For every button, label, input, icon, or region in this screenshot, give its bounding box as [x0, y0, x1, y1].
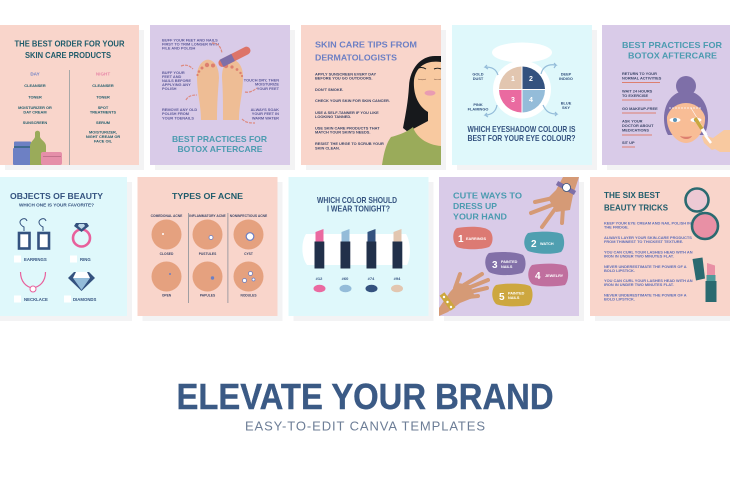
swatches	[314, 285, 403, 292]
eyeshadow palette	[492, 42, 552, 118]
tricks list: IRON IN UNDER TWO MINUTES FLAT.	[604, 254, 674, 258]
acne labels	[151, 214, 268, 298]
instruction notes: POLISH	[162, 86, 177, 91]
feet illustration	[196, 60, 243, 120]
heading: CUTE WAYS TO	[453, 190, 522, 200]
checkbox labels: DIAMONDS	[73, 297, 97, 302]
instruction notes: WARM WATER	[252, 116, 279, 120]
icon: ring	[73, 223, 90, 246]
tips list: MATCH YOUR SKIN'S NEEDS.	[315, 130, 370, 134]
list: GO MAKEUP-FREE	[622, 106, 658, 111]
tips list: LOOKING TANNED.	[315, 114, 351, 119]
heading	[10, 191, 103, 208]
panel: eyeshadow colour	[452, 25, 597, 170]
icon: nail file	[217, 45, 252, 68]
heading: best order	[14, 38, 124, 60]
instruction notes: FEET AND	[162, 74, 181, 79]
day column: SUNSCREEN	[23, 120, 47, 125]
colour labels: GOLD	[472, 72, 484, 76]
panel: six best beauty tricks	[590, 177, 730, 321]
blob labels: NAILS	[501, 265, 513, 269]
shade labels: #74	[368, 276, 375, 281]
instruction notes: FIRST TO TRIM LONGER WITH	[162, 42, 219, 46]
heading: skin care tips: SKIN CARE TIPS FROM	[315, 40, 417, 50]
shade labels: #94	[394, 276, 401, 281]
woman face with injection	[664, 76, 730, 152]
icon: lipstick	[692, 258, 716, 302]
blob labels: 2	[531, 239, 537, 250]
colour labels: DUST	[473, 76, 484, 81]
night column: MOISTURIZER,	[89, 130, 117, 134]
tips list: DON'T SMOKE.	[315, 87, 343, 92]
panel: botox aftercare list	[602, 25, 730, 170]
instruction notes: YOUR TOENAILS	[162, 116, 194, 120]
day column: DAY	[30, 72, 40, 76]
icon: diamond	[68, 272, 95, 291]
day column: TONER	[28, 94, 42, 100]
panel: dress up your hand	[439, 177, 584, 321]
panel: objects of beauty	[0, 177, 132, 321]
tips list: USE A SELF-TANNER IF YOU LIKE	[315, 110, 379, 115]
blob labels: WATCH	[540, 242, 554, 246]
heading: best practices: BEST PRACTICES FOR	[172, 134, 267, 144]
heading: WHICH ONE IS YOUR FAVORITE?	[19, 202, 94, 208]
arrows	[485, 63, 557, 117]
panel: skin care tips from dermatologists	[301, 25, 446, 170]
heading	[453, 190, 522, 222]
blob labels: 5	[499, 292, 505, 303]
night column: FACE OIL	[94, 138, 113, 144]
heading	[622, 40, 722, 60]
colour labels	[468, 72, 573, 112]
night column: NIGHT	[96, 72, 110, 76]
tricks list: YOU CAN CURL YOUR LASHES HEAD WITH AN	[604, 278, 693, 283]
tricks list: BOLD LIPSTICK.	[604, 268, 635, 273]
tips list: RESIST THE URGE TO SCRUB YOUR	[315, 141, 384, 146]
acne labels: CLOSED	[160, 252, 174, 256]
acne labels: PUSTULES	[199, 252, 217, 256]
heading: BOTOX AFTERCARE	[628, 50, 717, 60]
shade labels: #60	[342, 276, 349, 281]
acne labels: INFLAMMATORY ACNE	[189, 214, 226, 218]
acne labels: OPEN	[162, 294, 172, 298]
heading	[317, 195, 397, 214]
blob labels	[453, 227, 568, 306]
eyeshadow palette: 3	[511, 97, 515, 104]
eyeshadow palette: 1	[511, 76, 515, 83]
list: WAIT 24 HOURS	[622, 88, 653, 94]
list: NORMAL ACTIVITIES	[622, 76, 662, 80]
tricks list: BOLD LIPSTICK.	[604, 296, 635, 302]
eyeshadow palette: 2	[529, 76, 533, 83]
day column	[18, 72, 52, 125]
blob labels: EARRINGS	[466, 237, 487, 241]
day column: DAY CREAM	[23, 110, 47, 114]
tricks list: IRON IN UNDER TWO MINUTES FLAT.	[604, 282, 674, 287]
acne labels: PAPULES	[200, 294, 216, 298]
colour labels: PINK	[473, 102, 483, 107]
question heading: BEST FOR YOUR EYE COLOUR?	[468, 133, 576, 143]
panel: best order for skin care products	[0, 25, 144, 170]
tricks list: KEEP YOUR EYE CREAM AND NAIL POLISH IN	[604, 220, 691, 226]
title: elevate your brand: ELEVATE YOUR BRAND	[176, 376, 554, 417]
list: SIT UP	[622, 140, 635, 145]
night column: TREATMENTS	[90, 110, 117, 114]
night column: TONER	[96, 94, 110, 100]
checkbox labels: RING	[80, 257, 91, 262]
instruction notes: YOUR FEET	[257, 86, 280, 91]
blob labels: 3	[492, 260, 498, 271]
instruction notes: POLISH FROM	[162, 111, 189, 116]
heading: I WEAR TONIGHT?	[327, 204, 390, 214]
instruction notes: APPLYING ANY	[162, 82, 191, 87]
night column: NIGHT CREAM OR	[86, 134, 120, 139]
tricks list: NEVER UNDERESTIMATE THE POWER OF A	[604, 264, 687, 269]
heading: best order: THE BEST ORDER FOR YOUR	[14, 38, 124, 48]
blob labels: 1	[458, 234, 464, 245]
day column: MOISTURIZER OR	[18, 105, 52, 110]
tips list	[315, 72, 390, 150]
heading: BEAUTY TRICKS	[604, 202, 668, 212]
icon: skin care bottles	[13, 131, 62, 165]
panel: foot care botox aftercare	[150, 25, 295, 170]
heading: BEST PRACTICES FOR	[622, 40, 722, 50]
woman illustration	[382, 56, 441, 165]
bottom hand with bracelet	[439, 274, 488, 316]
heading: best order: SKIN CARE PRODUCTS	[25, 50, 111, 60]
heading: TYPES OF ACNE	[172, 191, 243, 201]
tricks list	[604, 220, 693, 302]
night column: SPOT	[98, 105, 109, 110]
checkbox labels: NECKLACE	[24, 297, 48, 302]
colour labels: INDIGO	[559, 76, 573, 81]
list: DOCTOR ABOUT	[622, 123, 654, 128]
subtitle: canva templates: EASY-TO-EDIT CANVA TEMPLATES	[245, 418, 485, 434]
night column: SERUM	[96, 120, 110, 125]
checkbox labels: EARRINGS	[24, 257, 47, 262]
acne labels: NONINFECTIOUS ACNE	[230, 214, 268, 218]
tricks list: YOU CAN CURL YOUR LASHES HEAD WITH AN	[604, 250, 693, 254]
shade labels: #12	[316, 276, 323, 281]
colour labels: BLUE	[561, 100, 572, 106]
instruction notes: MOISTURIZE	[255, 82, 279, 86]
night column	[86, 72, 120, 144]
tricks list: FROM THINNEST TO THICKEST TEXTURE.	[604, 239, 683, 244]
instruction notes: YOUR FEET IN	[252, 111, 279, 116]
list: ASK YOUR	[622, 118, 643, 124]
tips list: APPLY SUNSCREEN EVERY DAY	[315, 72, 376, 76]
arrows	[181, 43, 257, 123]
icon: compact	[686, 188, 718, 239]
acne labels: CYST	[244, 252, 253, 256]
tricks list: NEVER UNDERESTIMATE THE POWER OF A	[604, 292, 687, 298]
instruction notes: NAILS BEFORE	[162, 78, 191, 83]
tips list: SKIN CLEAN.	[315, 146, 340, 150]
night column: CLEANSER	[92, 83, 114, 88]
tips list: BEFORE YOU GO OUTDOORS.	[315, 76, 372, 80]
question heading	[468, 124, 576, 143]
tips list: CHECK YOUR SKIN FOR SKIN CANCER.	[315, 98, 390, 103]
heading: best practices: BOTOX AFTERCARE	[178, 144, 263, 154]
list: MEDICATIONS	[622, 128, 649, 132]
panel: types of acne	[138, 177, 282, 321]
heading: skin care tips: DERMATOLOGISTS	[315, 52, 397, 62]
list: TO EXERCISE	[622, 93, 648, 98]
heading: THE SIX BEST	[604, 190, 661, 200]
acne labels: COMEDONAL ACNE	[151, 214, 183, 218]
heading: best practices	[172, 134, 267, 154]
colour labels: SKY	[562, 105, 570, 110]
question heading: WHICH EYESHADOW COLOUR IS	[468, 124, 576, 134]
checkbox labels	[14, 256, 97, 302]
blob labels: PAINTED	[508, 292, 525, 296]
top hand with watch	[531, 177, 579, 227]
panel: lipstick colours	[288, 177, 434, 321]
blob labels: NAILS	[508, 296, 520, 300]
heading: OBJECTS OF BEAUTY	[10, 191, 103, 201]
instruction notes	[162, 38, 280, 120]
heading: YOUR HAND	[453, 212, 507, 222]
tricks list: THE FRIDGE.	[604, 224, 629, 230]
instruction notes: BUFF YOUR FEET AND NAILS	[162, 38, 218, 42]
day column: CLEANSER	[24, 83, 46, 88]
instruction notes: TOUCH DRY, THEN	[244, 78, 279, 82]
colour labels: FLAMINGO	[468, 106, 488, 112]
acne circles	[152, 220, 264, 292]
icon: earrings	[19, 219, 49, 248]
heading: skin care tips	[315, 40, 417, 62]
instruction notes: ALWAYS SOAK	[251, 107, 279, 112]
heading: WHICH COLOR SHOULD	[317, 195, 397, 205]
blob labels: PAINTED	[501, 260, 518, 264]
eyeshadow palette: 4	[529, 97, 533, 104]
instruction notes: BUFF YOUR	[162, 70, 185, 75]
shade labels	[316, 276, 401, 281]
instruction notes: FILE AND POLISH	[162, 46, 196, 50]
lipsticks	[302, 229, 410, 268]
instruction notes: REMOVE ANY OLD	[162, 107, 197, 112]
list	[622, 71, 662, 148]
colour labels: DEEP	[561, 72, 572, 76]
heading	[604, 190, 668, 212]
tips list: USE SKIN CARE PRODUCTS THAT	[315, 126, 380, 130]
tricks list: ALWAYS LAYER YOUR SKIN-CARE PRODUCTS	[604, 235, 692, 240]
blob labels: 4	[535, 271, 541, 282]
blob labels: JEWELRY	[545, 274, 564, 278]
heading: DRESS UP	[453, 201, 497, 211]
acne labels: NODULES	[240, 294, 257, 298]
icon: necklace	[20, 272, 46, 292]
list: RETURN TO YOUR	[622, 71, 657, 76]
